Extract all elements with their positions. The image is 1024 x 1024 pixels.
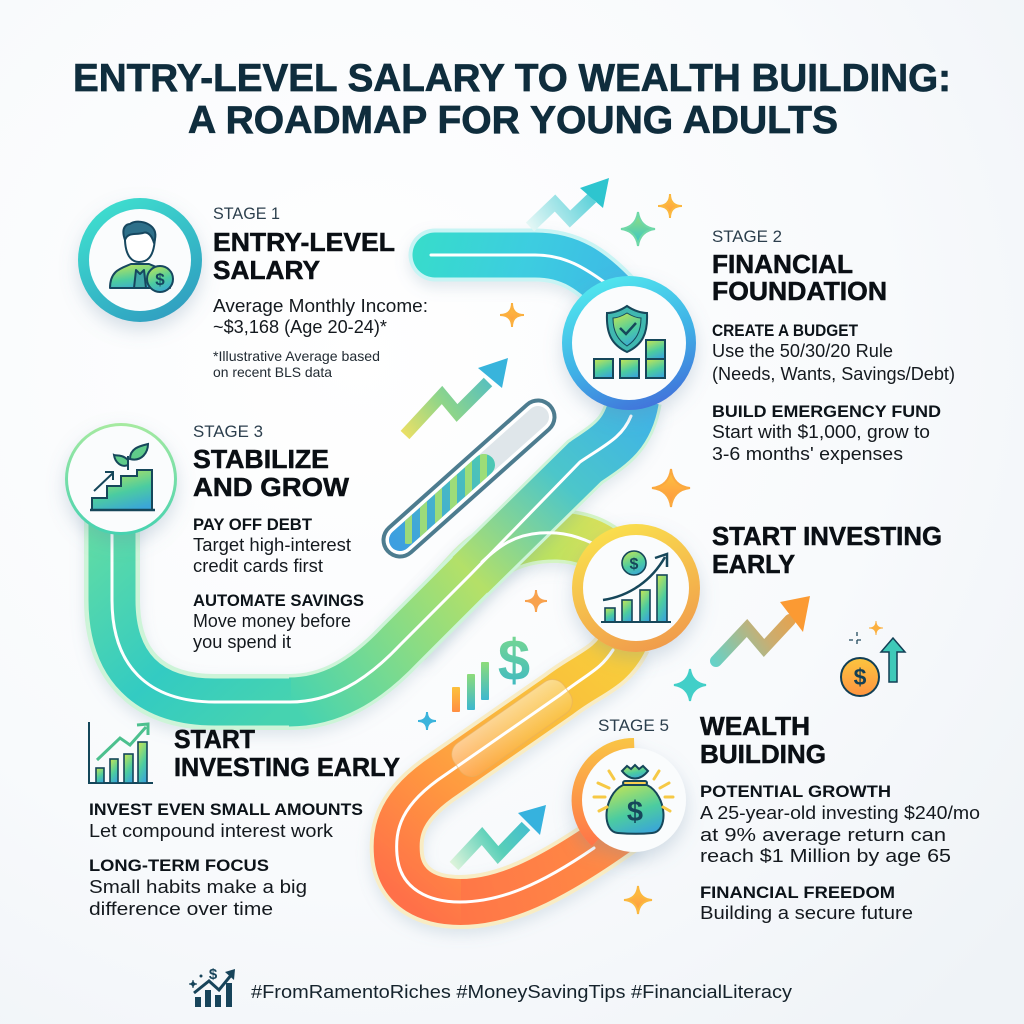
stage 5 text: BUILDING <box>700 741 826 769</box>
stage 2 text: FINANCIAL <box>712 251 853 279</box>
stage 1 text: STAGE 1 <box>213 204 280 223</box>
road: orange lower loop <box>397 640 628 902</box>
stage 4 text: START INVESTING <box>712 523 942 551</box>
stage 2 text: FOUNDATION <box>712 278 887 306</box>
title: ENTRY-LEVEL SALARY TO WEALTH BUILDING: <box>73 57 951 100</box>
stage 2 text: CREATE A BUDGET <box>712 322 858 340</box>
title <box>73 57 951 142</box>
stage 1 marker: $ <box>155 270 165 289</box>
stage 3 text: AUTOMATE SAVINGS <box>193 592 364 610</box>
icon: stairs and sprout <box>90 444 155 510</box>
stage 4 text: EARLY <box>712 551 795 579</box>
stage 4 marker <box>572 524 700 652</box>
stage 2 text: (Needs, Wants, Savings/Debt) <box>712 364 955 384</box>
icon: coin with up arrow: $ <box>854 664 867 690</box>
footer hashtags: #FromRamentoRiches #MoneySavingTips #FinancialLiteracy <box>251 981 793 1002</box>
road: top segment <box>435 255 628 335</box>
stage 3 text: PAY OFF DEBT <box>193 516 312 534</box>
arrow: loop growth <box>454 805 546 866</box>
stage 1 text: *Illustrative Average based <box>213 348 380 364</box>
stage 5 text: POTENTIAL GROWTH <box>700 783 891 801</box>
bars and dollar sign: $ <box>498 628 530 693</box>
road: green branch into start investing <box>405 536 618 642</box>
stage 2 text: Start with $1,000, grow to <box>712 422 930 442</box>
stage 3 text: Target high-interest <box>193 535 351 555</box>
stage 4 marker: $ <box>630 556 639 573</box>
arrow: right growth <box>716 596 810 661</box>
stage 3 text: you spend it <box>193 632 291 652</box>
stage 5 text: A 25-year-old investing $240/mo <box>700 803 980 823</box>
stage 2 text: 3-6 months' expenses <box>712 444 903 464</box>
stage 1 text: ENTRY-LEVEL <box>213 229 395 257</box>
progress capsule <box>400 417 538 540</box>
roadmap path <box>112 255 634 902</box>
icon: person with coin <box>110 222 173 292</box>
stage 5 marker: $ <box>627 796 643 828</box>
start investing early text: START <box>174 726 255 754</box>
stage 3 text: STAGE 3 <box>193 422 263 441</box>
stage 2 marker <box>562 276 696 410</box>
stage 5 text: FINANCIAL FREEDOM <box>700 884 895 902</box>
title: A ROADMAP FOR YOUNG ADULTS <box>188 99 838 142</box>
stage 2 text <box>712 227 955 464</box>
icon: coin with up arrow <box>841 621 905 696</box>
stage 4 text <box>712 523 942 579</box>
stage 3 text: AND GROW <box>193 474 350 502</box>
road: blue to green descent <box>112 400 634 702</box>
stage 1 marker <box>78 198 202 322</box>
icon: footer chart <box>189 966 235 1007</box>
start investing early text: INVESTING EARLY <box>174 754 400 782</box>
start investing early text: INVEST EVEN SMALL AMOUNTS <box>89 801 363 819</box>
road: lower left turn <box>112 500 291 702</box>
stage 5 label: STAGE 5 <box>598 716 669 735</box>
stage 3 text: STABILIZE <box>193 446 329 474</box>
icon: lower left chart <box>89 722 153 783</box>
stage 2 text: STAGE 2 <box>712 227 782 246</box>
glass capsule on road <box>446 674 578 782</box>
stage 5 text: WEALTH <box>700 713 810 741</box>
start investing early text: Let compound interest work <box>89 821 334 841</box>
stage 3 marker <box>65 423 177 535</box>
stage 1 text: SALARY <box>213 257 320 285</box>
stage 3 text <box>193 422 364 652</box>
stage 5 text: Building a secure future <box>700 903 913 923</box>
arrow: top growth <box>530 178 609 227</box>
stage 1 text: Average Monthly Income: <box>213 296 428 316</box>
arrow: left growth <box>405 358 508 435</box>
stage 1 text: ~$3,168 (Age 20-24)* <box>213 317 387 337</box>
icon: money bag <box>607 765 663 834</box>
stage 1 text: on recent BLS data <box>213 364 332 380</box>
start investing early text: difference over time <box>89 899 273 919</box>
stage 2 text: Use the 50/30/20 Rule <box>712 341 893 361</box>
icon: shield and bars <box>594 306 665 378</box>
start investing early text <box>89 726 400 919</box>
bars and dollar sign <box>452 628 530 712</box>
stage 5 text <box>700 713 980 923</box>
icon: footer chart: $ <box>209 966 218 983</box>
stage 3 text: Move money before <box>193 611 351 631</box>
stage 5 text: reach $1 Million by age 65 <box>700 846 951 866</box>
road center lines <box>112 255 631 902</box>
sparkles <box>418 194 706 914</box>
stage 3 text: credit cards first <box>193 556 323 576</box>
stage 2 text: BUILD EMERGENCY FUND <box>712 403 941 421</box>
start investing early text: Small habits make a big <box>89 877 307 897</box>
stage 1 text <box>213 204 428 380</box>
icon: money rays <box>594 771 673 811</box>
start investing early text: LONG-TERM FOCUS <box>89 857 269 875</box>
stage 5 marker <box>572 738 686 852</box>
icon: investing chart <box>601 551 671 622</box>
road: descent upper part <box>470 400 634 575</box>
stage 5 text: at 9% average return can <box>700 825 946 845</box>
road: descent middle part <box>289 574 471 702</box>
